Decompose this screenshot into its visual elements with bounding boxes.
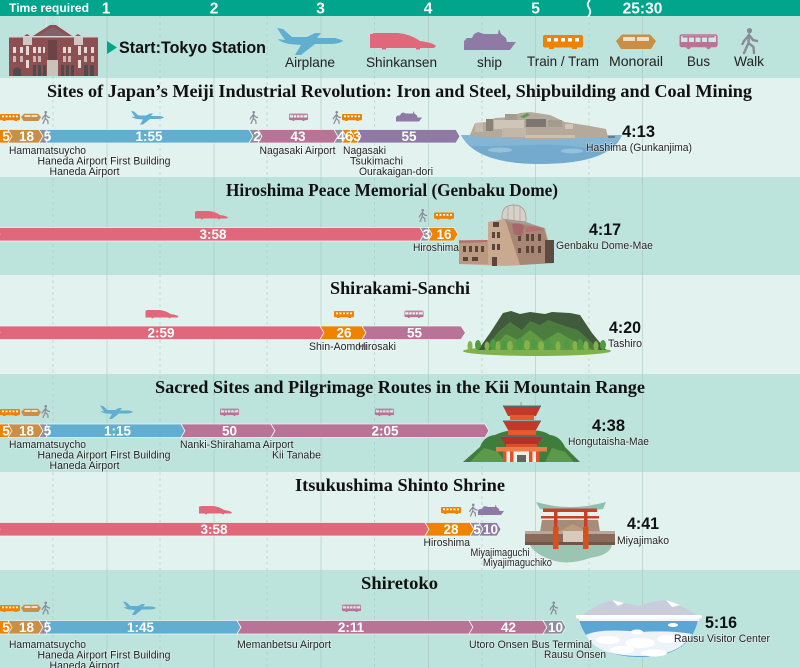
route bar: 55 [401, 129, 417, 144]
icon: shinkansen: Shinkansen [366, 55, 437, 70]
header bar: time axis [0, 0, 800, 18]
route bar: 6 [345, 129, 353, 144]
header bar: time axis: 5 [531, 0, 540, 18]
illustration: Tokyo Station [9, 16, 98, 76]
stop labels: Nanki-Shirahama Airport [180, 439, 294, 451]
route bar [0, 522, 501, 537]
stop labels: Miyajimaguchiko [483, 557, 552, 569]
icon: ship [464, 29, 516, 70]
stop labels: Haneda Airport [50, 460, 120, 472]
route bar: 26 [336, 326, 352, 340]
illustration: Genbaku Dome [459, 205, 554, 266]
route bar: 5 [2, 424, 10, 438]
icon: shinkansen [366, 33, 437, 70]
stop labels over illustration [469, 639, 606, 661]
illustration: Shiretoko ice and mountains [576, 600, 702, 657]
icon: bus: Bus [687, 54, 710, 69]
panel: Itsukushima Shinto Shrine [0, 475, 669, 569]
route bar: 1:45 [127, 620, 154, 635]
total time and destination: 4:41 [627, 514, 659, 533]
route bar: 5 [44, 620, 52, 635]
stop labels [424, 537, 552, 569]
heading: Sacred Sites and Pilgrimage Routes in the Kii Mountain Range [155, 377, 645, 397]
route bar: 18 [19, 129, 34, 144]
header bar: time axis: 3 [316, 0, 325, 18]
total time and destination [674, 613, 770, 645]
total time and destination: Rausu Visitor Center [674, 633, 770, 645]
route bar: 5 [44, 129, 52, 144]
route bar: 28 [443, 522, 459, 537]
total time and destination: Tashiro [608, 338, 642, 350]
illustration: Kumano shrine pagoda [463, 402, 580, 462]
icon: airplane [277, 28, 343, 70]
stop labels [9, 639, 331, 668]
stop labels: Ourakaigan-dori [359, 166, 433, 178]
stop labels over illustration: Utoro Onsen Bus Terminal [469, 639, 592, 651]
route bar: 3 [353, 129, 361, 144]
icon: monorail [609, 34, 663, 69]
transport icons [0, 111, 422, 124]
stop labels over illustration: Rausu Onsen [544, 649, 606, 661]
total time and destination: 4:38 [592, 416, 625, 435]
route bar: 43 [290, 129, 306, 144]
header bar: time axis: 2 [210, 0, 218, 18]
route bar: 5 [473, 522, 481, 537]
route bar [0, 620, 566, 635]
route bar: 3:58 [200, 522, 228, 537]
panel: Meiji Industrial Revolution sites [0, 81, 752, 178]
icon: walk [734, 28, 764, 69]
icon: bus [680, 35, 717, 69]
route bar: 2:05 [371, 424, 399, 438]
icon: ship: ship [477, 55, 502, 70]
stop labels: Haneda Airport First Building [38, 650, 170, 662]
stop labels: Haneda Airport First Building [38, 156, 170, 168]
total time and destination [586, 122, 692, 154]
route bar: 2:59 [147, 326, 175, 340]
route bar [0, 326, 466, 340]
heading: Shiretoko [361, 573, 438, 593]
icon: train and tram [527, 35, 599, 69]
total time and destination: Genbaku Dome-Mae [556, 240, 653, 252]
route bar [0, 129, 460, 144]
stop labels: Memanbetsu Airport [237, 639, 331, 651]
transport icons [0, 405, 394, 419]
heading: Sites of Japan’s Meiji Industrial Revolution: Iron and Steel, Shipbuilding and Coal Mining [47, 81, 752, 101]
total time and destination: Hongutaisha-Mae [568, 436, 649, 448]
route bar: 5 [2, 620, 10, 635]
panel: Hiroshima Peace Memorial [0, 180, 653, 266]
stop labels: Haneda Airport First Building [38, 450, 170, 462]
route bar: 18 [19, 620, 34, 635]
route bar: 5 [2, 129, 10, 144]
route bar: 4 [337, 129, 345, 144]
route bar: 10 [548, 620, 563, 635]
icon: walk: Walk [734, 54, 764, 69]
icon: train and tram: Train / Tram [527, 54, 599, 69]
total time and destination [556, 220, 653, 252]
stop labels: Shin-Aomori [309, 341, 367, 353]
total time and destination: 4:13 [622, 122, 655, 141]
total time and destination: Hashima (Gunkanjima) [586, 142, 692, 154]
illustration: Shirakami mountains [463, 311, 611, 356]
stop labels [309, 341, 396, 353]
stop labels: Hirosaki [358, 341, 396, 353]
stop labels: Tsukimachi [350, 156, 403, 168]
icon: monorail: Monorail [609, 54, 663, 69]
panel: Shirakami-Sanchi [0, 278, 642, 356]
total time and destination [568, 416, 649, 448]
route bar: 42 [501, 620, 516, 635]
header bar: time axis: 25:30 [623, 0, 662, 18]
heading: Itsukushima Shinto Shrine [295, 475, 505, 495]
route bar: 55 [407, 326, 422, 340]
total time and destination: Miyajimako [617, 535, 669, 547]
route bar: 16 [436, 227, 452, 242]
header bar: time axis: Time required [9, 1, 89, 15]
panel: Shiretoko [0, 573, 770, 668]
route bar: 3 [423, 227, 431, 242]
panel: Kii Mountain Range [0, 377, 649, 472]
stop labels: Miyajimaguchi [470, 547, 530, 559]
route bar: 2:11 [338, 620, 365, 635]
route bar: 18 [19, 424, 34, 438]
stop label: Hiroshima [413, 242, 460, 254]
stop labels [9, 439, 321, 472]
icon: airplane: Airplane [285, 55, 335, 70]
stop labels: Hamamatsuycho [9, 639, 86, 651]
total time and destination [608, 318, 642, 350]
route bar: 2 [253, 129, 261, 144]
route bar: 10 [483, 522, 498, 537]
stop labels: Nagasaki Airport [260, 145, 336, 157]
total time and destination [617, 514, 669, 547]
stop labels: Haneda Airport [50, 166, 120, 178]
start marker: Start:Tokyo Station [119, 38, 266, 57]
route bar: 1:55 [135, 129, 163, 144]
header bar: time axis: 1 [102, 0, 111, 18]
transport icons [146, 310, 423, 318]
transport icons [0, 602, 558, 615]
total time and destination: 4:20 [609, 318, 641, 337]
total time and destination: 4:17 [589, 220, 621, 239]
stop labels [9, 145, 433, 178]
route bar [0, 227, 458, 242]
transport icons [199, 504, 504, 516]
route bar: 3:58 [199, 227, 227, 242]
heading: Shirakami-Sanchi [330, 278, 470, 298]
stop labels: Hamamatsuycho [9, 145, 86, 157]
header bar: time axis: 4 [424, 0, 433, 18]
total time and destination: 5:16 [705, 613, 737, 632]
illustration: Itsukushima torii [525, 502, 615, 562]
stop labels: Kii Tanabe [272, 450, 321, 462]
route bar: 5 [44, 424, 52, 438]
transport icons [195, 209, 454, 222]
route bar: 1:15 [104, 424, 131, 438]
heading: Hiroshima Peace Memorial (Genbaku Dome) [226, 180, 558, 200]
route bar [0, 424, 489, 438]
stop labels: Nagasaki [343, 145, 386, 157]
stop labels: Hiroshima [424, 537, 471, 549]
stop labels: Hamamatsuycho [9, 439, 86, 451]
illustration: Hashima island [461, 112, 622, 164]
route bar: 50 [222, 424, 237, 438]
legend [277, 28, 764, 70]
